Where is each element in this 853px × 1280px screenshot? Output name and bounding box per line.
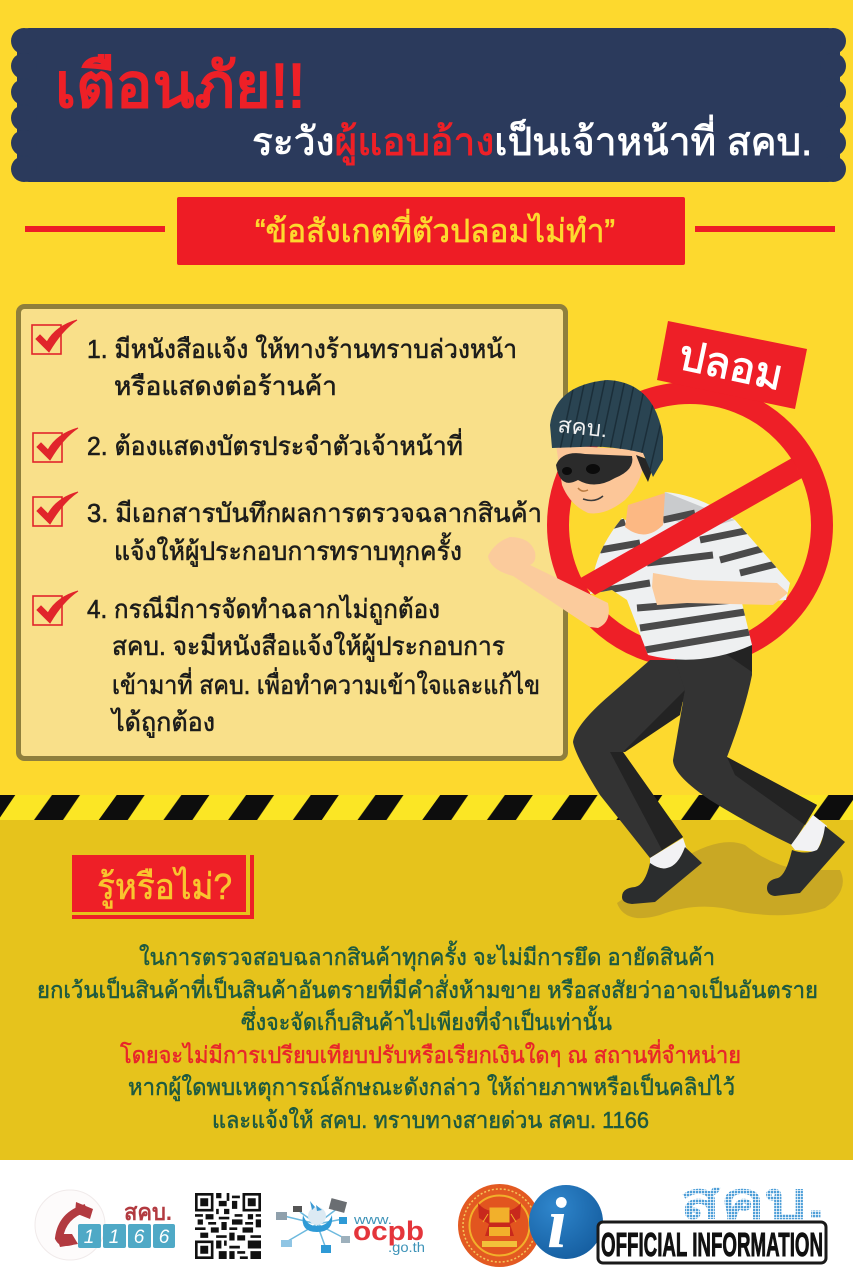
- slash: [577, 458, 802, 595]
- neck and head: [550, 380, 665, 535]
- callout heading: did you know: [72, 855, 254, 919]
- item 4: เข้ามาที่ สคบ. เพื่อทำความเข้าใจและแก้ไข: [112, 667, 540, 700]
- QR code: [195, 1193, 261, 1259]
- item 4: สคบ. จะมีหนังสือแจ้งให้ผู้ประกอบการ: [112, 631, 505, 662]
- item 1: [87, 334, 517, 401]
- mask: [556, 453, 632, 485]
- section heading: red banner: [25, 197, 835, 265]
- logo: hotline 1166: สคบ.: [124, 1199, 172, 1225]
- logo: ocpb network: ocpb: [353, 1216, 424, 1246]
- item 3: 3. มีเอกสารบันทึกผลการตรวจฉลากสินค้า: [87, 498, 542, 528]
- arms: [488, 537, 788, 628]
- logo: official information: [598, 1173, 826, 1263]
- logo: ocpb network: [276, 1198, 425, 1255]
- icon: check 4: [33, 591, 78, 625]
- prohibition ring: [558, 393, 822, 657]
- icon: info ball: i: [547, 1183, 567, 1263]
- title: เตือนภัย!!: [55, 52, 305, 121]
- icon: info ball: [529, 1183, 603, 1263]
- item 4: ได้ถูกต้อง: [110, 707, 215, 738]
- logo: hotline 1166: 1: [109, 1227, 119, 1248]
- text block: notice: ในการตรวจสอบฉลากสินค้าทุกครั้ง จะไม่มีการยึด อายัดสินค้า: [139, 941, 715, 971]
- logo: hotline 1166: 1: [84, 1227, 94, 1248]
- text block: notice: ซึ่งจะจัดเก็บสินค้าไปเพียงที่จำเป็นเท่านั้น: [241, 1006, 612, 1035]
- logo: hotline 1166: 6: [134, 1227, 145, 1248]
- text block: notice: ยกเว้นเป็นสินค้าที่เป็นสินค้าอันตรายที่มีคำสั่งห้ามขาย หรือสงสัยว่าอาจเป็นอันตราย: [37, 974, 818, 1003]
- section heading: red banner: “ข้อสังเกตที่ตัวปลอมไม่ทำ”: [255, 209, 615, 249]
- shirt: [590, 492, 790, 660]
- text block: notice: โดยจะไม่มีการเปรียบเทียบปรับหรือเรียกเงินใดๆ ณ สถานที่จำหน่าย: [120, 1039, 741, 1068]
- item 1: หรือแสดงต่อร้านค้า: [114, 371, 337, 401]
- item 1: 1. มีหนังสือแจ้ง ให้ทางร้านทราบล่วงหน้า: [87, 334, 517, 364]
- item 2: 2. ต้องแสดงบัตรประจำตัวเจ้าหน้าที่: [87, 428, 463, 461]
- item 4: [87, 594, 540, 738]
- item 4: 4. กรณีมีการจัดทำฉลากไม่ถูกต้อง: [87, 594, 440, 625]
- panel: checklist: [18, 306, 566, 758]
- hat: สคบ.: [556, 412, 609, 442]
- text block: notice: หากผู้ใดพบเหตุการณ์ลักษณะดังกล่าว ให้ถ่ายภาพหรือเป็นคลิปไว้: [128, 1072, 735, 1101]
- item 3: แจ้งให้ผู้ประกอบการทราบทุกครั้ง: [114, 532, 462, 567]
- logo: ocpb network: .go.th: [388, 1239, 425, 1255]
- trousers: [573, 645, 817, 858]
- logo: hotline 1166: 6: [159, 1227, 170, 1248]
- hat: [550, 380, 665, 477]
- illustration: thief with prohibition sign: [488, 321, 845, 918]
- logo: hotline 1166: [35, 1190, 175, 1260]
- logo: OCPB seal: [458, 1184, 541, 1267]
- logo: ocpb network: www.: [353, 1212, 392, 1227]
- header banner: [11, 28, 846, 182]
- shoes: [622, 826, 845, 904]
- fake tag: ปลอม: [675, 331, 787, 399]
- icon: check 3: [33, 492, 78, 526]
- icon: check 1: [32, 320, 77, 354]
- shadow: [617, 842, 843, 918]
- socks: [650, 815, 827, 870]
- item 3: [87, 498, 542, 567]
- logo: official information: สคบ.: [680, 1173, 825, 1229]
- text block: notice: และแจ้งให้ สคบ. ทราบทางสายด่วน สคบ. 1166: [212, 1107, 649, 1133]
- icon: check 2: [33, 428, 78, 462]
- callout heading: did you know: รู้หรือไม่?: [97, 866, 232, 909]
- fake tag: [657, 321, 807, 409]
- text block: notice: [37, 941, 818, 1133]
- subtitle: ระวังผู้แอบอ้างเป็นเจ้าหน้าที่ สคบ.: [252, 115, 812, 165]
